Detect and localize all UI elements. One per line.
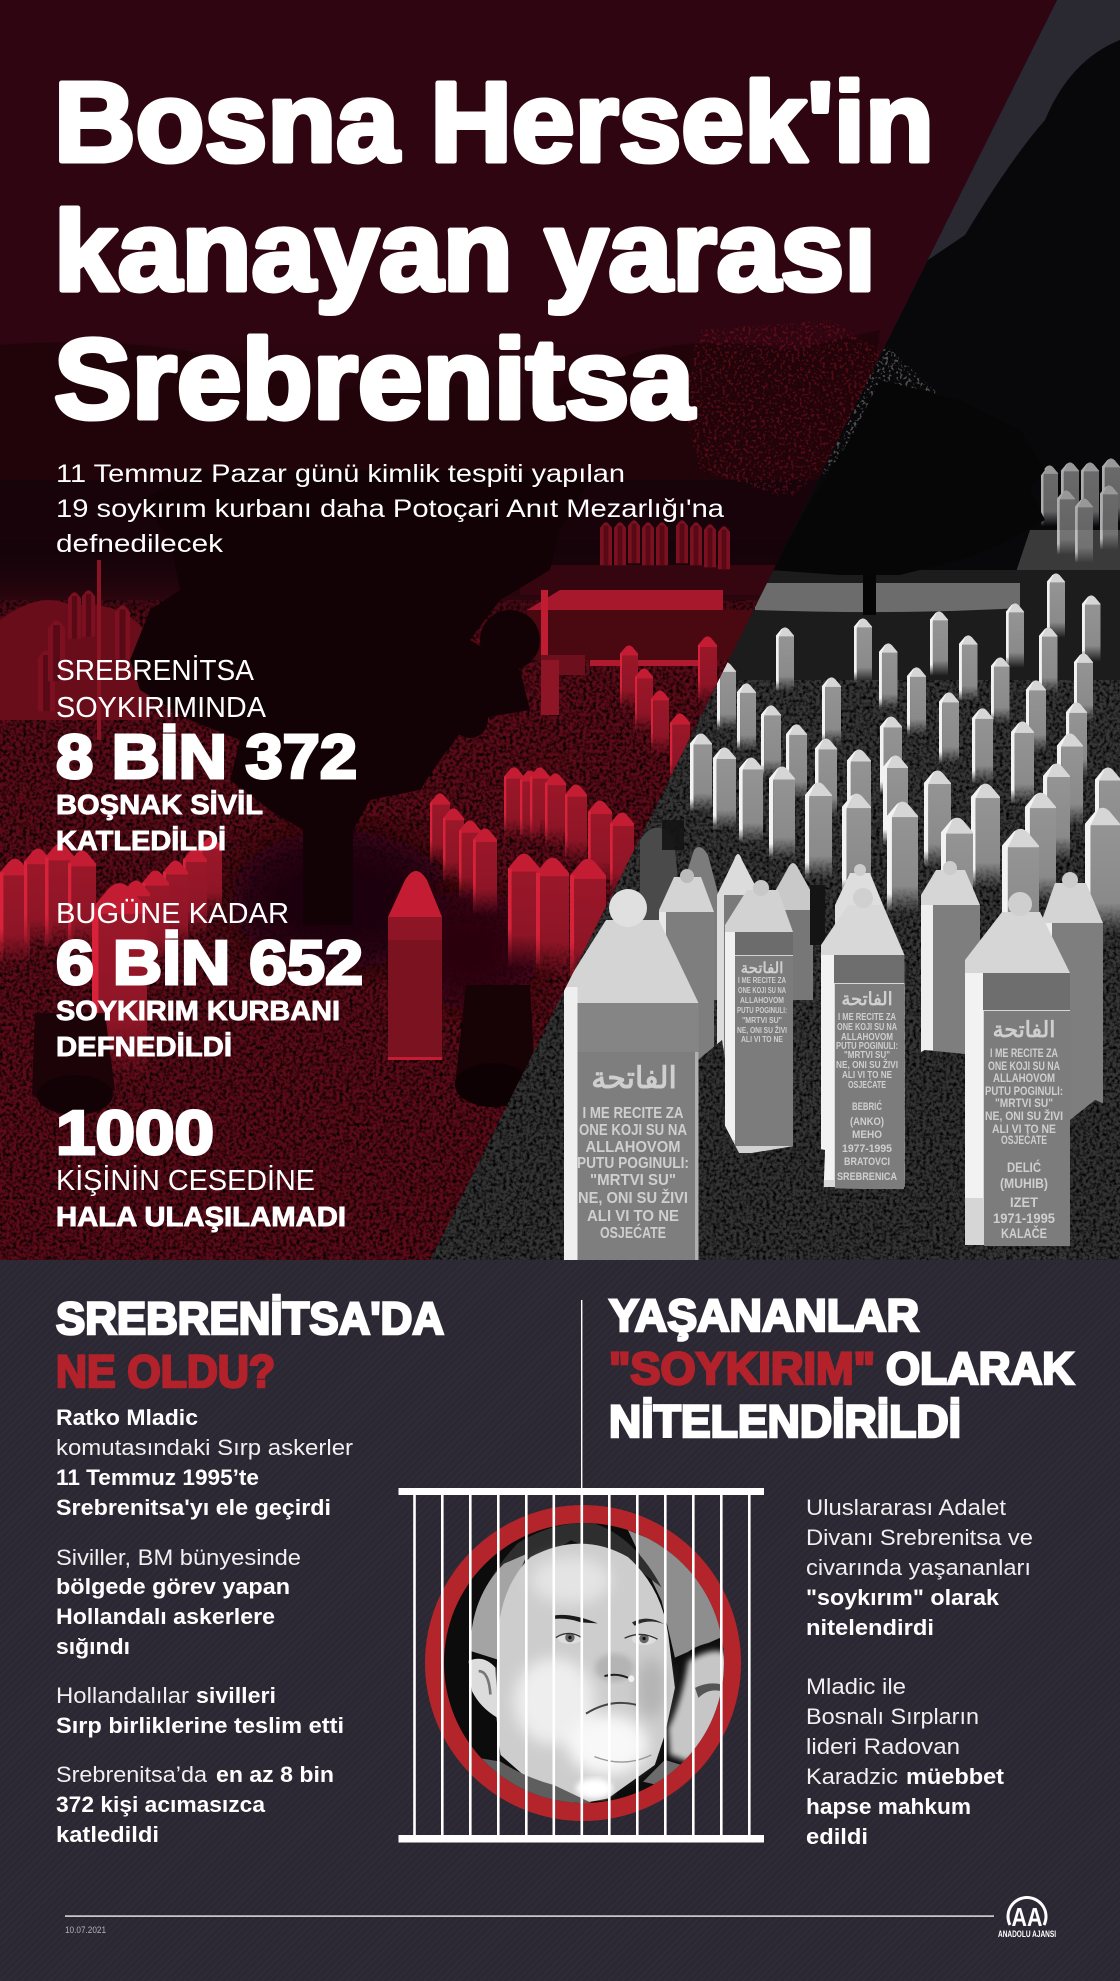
text block: left column: Srebrenitsa'yı ele geçirdi: [56, 1495, 331, 1520]
logo: Anadolu Ajansi: AA: [1012, 1902, 1043, 1932]
text block: right column: edildi: [806, 1824, 868, 1849]
front gravestone B: ALLAHOVOM: [740, 996, 784, 1005]
title: Srebrenitsa: [54, 316, 695, 442]
dark markers: [32, 985, 535, 1115]
text block: right column: civarında yaşananları: [806, 1555, 1031, 1580]
text block: right column: Uluslararası Adalet: [806, 1495, 1006, 1520]
text block: left column: [56, 1405, 353, 1847]
far red fence of stones: [520, 520, 780, 595]
heading: genocide verdict: YAŞANANLAR: [609, 1290, 919, 1341]
front gravestone B: I ME RECITE ZA: [738, 976, 786, 985]
middle row big stones: [640, 828, 678, 920]
text block: left column: Hollandalılar: [56, 1683, 189, 1708]
front gravestone D: [965, 892, 1070, 1246]
front gravestone C: NE, ONI SU ŽIVI: [836, 1058, 898, 1071]
stat: 8 bin 372: SREBRENİTSA: [56, 654, 255, 687]
front gravestone D: ALI VI TO NE: [992, 1122, 1056, 1136]
cage bars: [398, 1300, 764, 1842]
front gravestone C: الفاتحة: [841, 989, 893, 1009]
text block: right column: hapse mahkum: [806, 1794, 971, 1819]
front gravestone C: I ME RECITE ZA: [838, 1012, 896, 1023]
front gravestone B: "MRTVI SU": [742, 1016, 782, 1025]
front gravestone C: BRATOVCI: [844, 1156, 890, 1168]
front gravestone C: MEHO: [852, 1129, 882, 1141]
stat: 6 bin 652: SOYKIRIM KURBANI: [56, 995, 340, 1026]
text block: right column: lideri Radovan: [806, 1734, 960, 1759]
heading: what happened: [56, 1293, 444, 1397]
text block: right column: Mladic ile: [806, 1674, 906, 1699]
front gravestone D: PUTU POGINULI:: [985, 1084, 1063, 1098]
text block: left column: 11 Temmuz 1995’te: [56, 1465, 259, 1490]
text block: left column: komutasındaki Sırp askerler: [56, 1435, 353, 1460]
title: Bosna Hersek'in: [54, 59, 934, 185]
text block: right column: Karadzic: [806, 1764, 898, 1789]
heading: genocide verdict: [609, 1290, 1074, 1447]
text block: right column: Bosnalı Sırpların: [806, 1704, 979, 1729]
stat: 8 bin 372: BOŞNAK SİVİL: [56, 789, 263, 820]
subtitle text: 11 Temmuz Pazar günü kimlik tespiti yapılan: [56, 460, 625, 488]
stat: 6 bin 652: [56, 898, 363, 1062]
heading: genocide verdict: OLARAK: [886, 1343, 1074, 1394]
front gravestone B: [725, 880, 793, 1153]
front gravestone A: OSJEĆATE: [600, 1223, 666, 1242]
photo panel: grey cemetery (right of diagonal): [430, 0, 1120, 1260]
logo: Anadolu Ajansi: [998, 1898, 1056, 1939]
front gravestone B: الفاتحة: [741, 960, 783, 977]
front gravestone C: ONE KOJI SU NA: [837, 1022, 897, 1033]
stat: 1000: [56, 1099, 346, 1232]
front gravestone B: NE, ONI SU ŽIVI: [737, 1026, 787, 1035]
stat: 1000: KİŞİNİN CESEDİNE: [56, 1164, 315, 1197]
text block: right column: "soykırım" olarak: [806, 1585, 1000, 1610]
stat: 8 bin 372: KATLEDİLDİ: [56, 825, 226, 856]
front gravestone D: IZET: [1010, 1194, 1038, 1210]
front gravestone A: I ME RECITE ZA: [582, 1105, 684, 1122]
heading: genocide verdict: "SOYKIRIM": [609, 1343, 875, 1394]
text block: left column: katledildi: [56, 1822, 159, 1847]
front gravestone D: NE, ONI SU ŽIVI: [985, 1108, 1063, 1123]
heading: genocide verdict: NİTELENDİRİLDİ: [609, 1396, 961, 1447]
heading: what happened: NE OLDU?: [56, 1346, 275, 1397]
title: [54, 59, 934, 442]
subtitle text: defnedilecek: [56, 530, 224, 558]
stat: 1000: HALA ULAŞILAMADI: [56, 1201, 346, 1232]
front gravestone D: (MUHIB): [1000, 1175, 1048, 1191]
stat: 6 bin 652: DEFNEDİLDİ: [56, 1031, 232, 1062]
front gravestone D: "MRTVI SU": [995, 1096, 1053, 1110]
title: kanayan yarası: [54, 188, 876, 314]
front gravestone D: KALAČE: [1001, 1224, 1047, 1241]
front gravestone D: ONE KOJI SU NA: [988, 1059, 1060, 1073]
grass behind front stones: [698, 1040, 1103, 1128]
front gravestone A: ALLAHOVOM: [586, 1139, 680, 1156]
text block: left column: Srebrenitsa’da: [56, 1762, 208, 1787]
stat: 8 bin 372: 8 BİN 372: [56, 723, 357, 792]
logo: Anadolu Ajansi: ANADOLU AJANSI: [998, 1929, 1056, 1939]
front gravestone A: NE, ONI SU ŽIVI: [578, 1188, 688, 1207]
heading: what happened: SREBRENİTSA'DA: [56, 1293, 444, 1344]
large red gravestone: [388, 871, 442, 1060]
front gravestone D: DELIĆ: [1007, 1158, 1041, 1175]
stat: 6 bin 652: 6 BİN 652: [56, 929, 363, 998]
front gravestone D: ALLAHOVOM: [993, 1071, 1055, 1085]
red grave rows: [0, 767, 634, 1080]
text block: left column: sığındı: [56, 1634, 130, 1659]
front gravestone D: OSJEĆATE: [1001, 1132, 1047, 1147]
text block: left column: 372 kişi acımasızca: [56, 1792, 266, 1817]
portrait in red ring: [425, 1505, 741, 1821]
front gravestone D: 1971-1995: [993, 1210, 1055, 1226]
text block: right column: müebbet: [906, 1764, 1005, 1789]
front gravestone A: PUTU POGINULI:: [577, 1155, 689, 1172]
grass foreground: [725, 1126, 954, 1232]
front gravestone C: SREBRENICA: [837, 1171, 897, 1183]
text block: left column: bölgede görev yapan: [56, 1574, 290, 1599]
dark tree silhouette: [770, 380, 1045, 575]
text block: right column: Divanı Srebrenitsa ve: [806, 1525, 1033, 1550]
text block: left column: Ratko Mladic: [56, 1405, 198, 1430]
front gravestone C: BEBRIĆ: [852, 1100, 882, 1113]
stat: 8 bin 372: SOYKIRIMINDA: [56, 692, 267, 724]
front gravestone C: [821, 888, 904, 1189]
front gravestone C: 1977-1995: [842, 1143, 892, 1155]
text block: right column: nitelendirdi: [806, 1615, 934, 1640]
subtitle text: [56, 460, 724, 558]
front gravestone C: OSJEĆATE: [848, 1078, 886, 1091]
stat: 8 bin 372: [56, 654, 357, 856]
front gravestone C: (ANKO): [850, 1116, 884, 1128]
front gravestone D: الفاتحة: [993, 1017, 1055, 1042]
text block: left column: Hollandalı askerlere: [56, 1604, 275, 1629]
front gravestone C: PUTU POGINULI:: [836, 1041, 898, 1052]
front gravestone A: الفاتحة: [591, 1062, 677, 1095]
footer line and date: 10.07.2021: [65, 1925, 106, 1936]
front gravestone B: PUTU POGINULI:: [737, 1006, 787, 1015]
left distant hill stones: [0, 590, 150, 720]
front gravestone B: ONE KOJI SU NA: [738, 986, 786, 995]
front gravestone C: "MRTVI SU": [844, 1050, 890, 1061]
front gravestone C: ALI VI TO NE: [842, 1070, 892, 1081]
red wall and pole: [527, 590, 757, 785]
text block: left column: Sırp birliklerine teslim etti: [56, 1713, 344, 1738]
stat: 1000: 1000: [56, 1099, 214, 1168]
text block: right column: [806, 1495, 1033, 1849]
black tree: [97, 470, 590, 925]
front gravestone C: ALLAHOVOM: [841, 1032, 893, 1043]
photo panel: red cemetery (left of diagonal): [0, 0, 1060, 1260]
subtitle text: 19 soykırım kurbanı daha Potoçari Anıt Mezarlığı'na: [56, 495, 724, 523]
front gravestone A: ALI VI TO NE: [587, 1208, 679, 1225]
text block: left column: sivilleri: [196, 1683, 276, 1708]
far stones: [1041, 458, 1120, 563]
rows of white gravestones: [690, 573, 1120, 961]
front gravestone A: ONE KOJI SU NA: [579, 1122, 687, 1139]
front gravestone A: "MRTVI SU": [590, 1172, 676, 1189]
text block: left column: Siviller, BM bünyesinde: [56, 1545, 301, 1570]
front gravestone D: I ME RECITE ZA: [990, 1046, 1058, 1060]
stat: 6 bin 652: BUGÜNE KADAR: [56, 898, 289, 930]
text block: left column: en az 8 bin: [216, 1762, 334, 1787]
front gravestone A: [564, 889, 698, 1260]
front gravestone B: ALI VI TO NE: [741, 1035, 784, 1044]
